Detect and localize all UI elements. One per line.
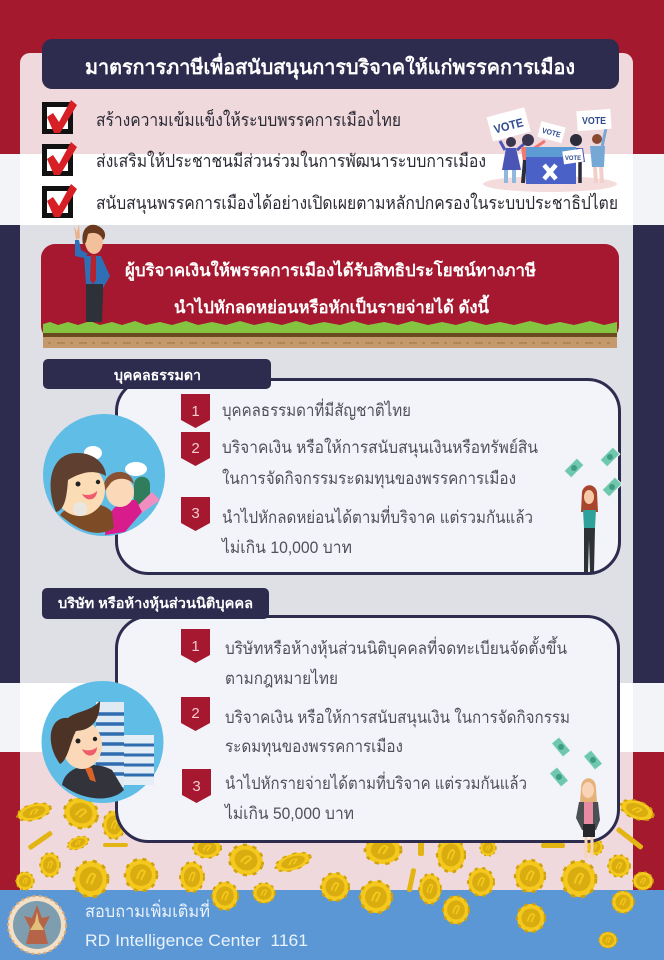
section 1 label: บุคคลธรรมดา <box>114 367 201 384</box>
section 2 item 3: 3 <box>192 778 201 795</box>
section 1 item 1: 1 <box>191 403 200 420</box>
family avatar <box>43 414 165 536</box>
section 1 item 3: ไม่เกิน 10,000 บาท <box>220 537 352 557</box>
section 2 item 1: บริษัทหรือห้างหุ้นส่วนนิติบุคคลที่จดทะเบียนจัดตั้งขึ้น <box>225 636 567 659</box>
woman in teal <box>581 485 598 572</box>
section 1 item 3 <box>181 497 533 557</box>
section 2 item 3: ไม่เกิน 50,000 บาท <box>223 803 354 823</box>
section 2 card <box>42 588 618 842</box>
section 2 item 2 <box>181 697 570 757</box>
vote sign left: VOTE <box>492 115 525 137</box>
section 2 label <box>42 588 269 619</box>
ballot box <box>526 147 576 184</box>
section 2 item 1: ตามกฎหมายไทย <box>225 668 338 688</box>
section 1 card <box>43 359 620 574</box>
section 1 item 2: บริจาคเงิน หรือให้การสนับสนุนเงินหรือทรัพย์สิน <box>222 437 538 458</box>
ballot card: VOTE <box>565 155 582 162</box>
section 2 label: บริษัท หรือห้างหุ้นส่วนนิติบุคคล <box>58 595 253 612</box>
title bar <box>42 39 619 89</box>
banner <box>41 244 619 348</box>
section 2 item 3: นำไปหักรายจ่ายได้ตามที่บริจาค แต่รวมกันแล้ว <box>225 771 527 793</box>
contact heading: สอบถามเพิ่มเติมที่ <box>85 899 210 921</box>
falling gold coins <box>16 793 656 948</box>
money and woman 1 <box>564 447 622 572</box>
section 2 item 1: 1 <box>191 638 200 655</box>
contact line: RD Intelligence Center 1161 <box>85 931 308 950</box>
checkbox 1 <box>44 100 77 133</box>
money and woman 2 <box>549 737 603 858</box>
banner line 2: นำไปหักลดหย่อนหรือหักเป็นรายจ่ายได้ ดังนี้ <box>174 294 489 317</box>
checkbox 3 <box>44 184 77 217</box>
section 1 label <box>43 359 271 389</box>
section 2 item 1 <box>181 629 567 688</box>
banner line 1: ผู้บริจาคเงินให้พรรคการเมืองได้รับสิทธิประโยชน์ทางภาษี <box>125 260 536 282</box>
grass and soil <box>43 321 617 348</box>
section 1 item 2: 2 <box>191 440 200 457</box>
checkbox 2 <box>44 142 77 175</box>
woman in grey jacket <box>576 778 600 858</box>
section 1 item 2: ในการจัดกิจกรรมระดมทุนของพรรคการเมือง <box>222 468 516 489</box>
section 1 item 1 <box>181 394 411 428</box>
section 1 item 3: นำไปหักลดหย่อนได้ตามที่บริจาค แต่รวมกันแล้ว <box>222 505 533 527</box>
voters <box>500 128 606 183</box>
vote sign right: VOTE <box>582 116 606 127</box>
section 2 item 3 <box>182 769 527 823</box>
vote illustration <box>483 107 617 192</box>
item 2: ส่งเสริมให้ประชาชนมีส่วนร่วมในการพัฒนาระบบการเมือง <box>96 150 486 171</box>
checklist <box>44 100 618 217</box>
man in blue shirt <box>74 224 110 322</box>
section 2 item 2: 2 <box>191 705 200 722</box>
section 1 item 2 <box>181 432 538 489</box>
title text: มาตรการภาษีเพื่อสนับสนุนการบริจาคให้แก่พรรคการเมือง <box>85 52 575 80</box>
section 2 item 2: บริจาคเงิน หรือให้การสนับสนุนเงิน ในการจัดกิจกรรม <box>225 707 570 728</box>
businessman avatar <box>42 681 164 803</box>
revenue department seal <box>8 896 66 954</box>
footer <box>8 896 308 954</box>
section 2 item 2: ระดมทุนของพรรคการเมือง <box>225 737 403 757</box>
footer bar background <box>0 890 664 960</box>
vote sign middle: VOTE <box>541 126 562 139</box>
section 1 item 3: 3 <box>191 505 200 522</box>
item 1: สร้างความเข้มแข็งให้ระบบพรรคการเมืองไทย <box>96 108 401 130</box>
section 1 item 1: บุคคลธรรมดาที่มีสัญชาติไทย <box>222 398 411 421</box>
